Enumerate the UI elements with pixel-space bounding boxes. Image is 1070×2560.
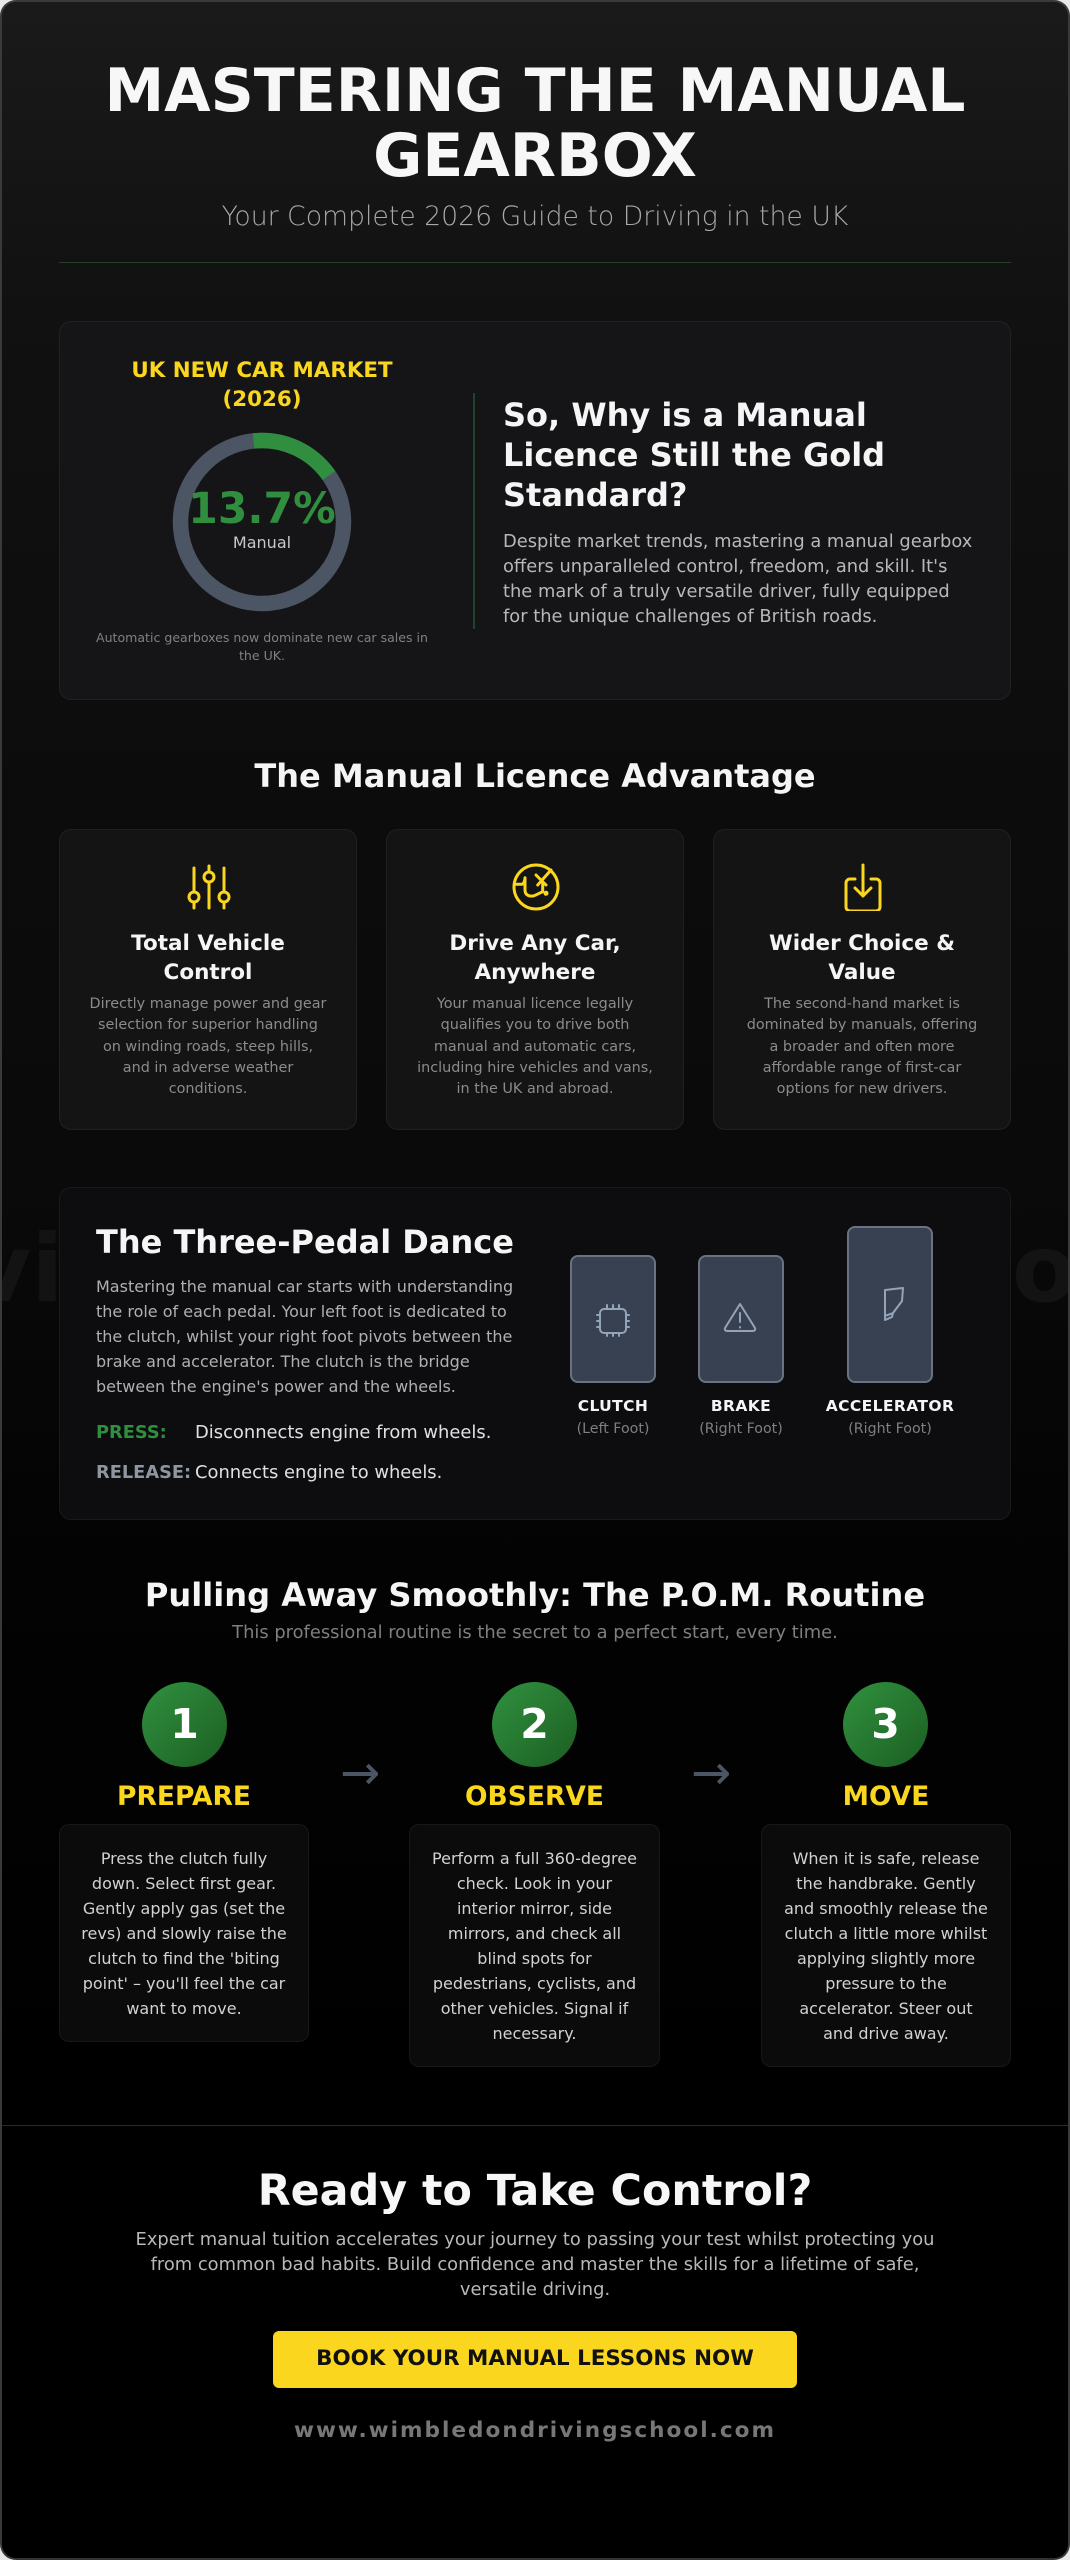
card title: Wider Choice & [769,931,955,956]
donut chart [172,432,352,612]
cta button: BOOK YOUR MANUAL LESSONS NOW [316,2346,754,2371]
why heading: So, Why is a Manual [503,396,867,434]
cta text: Expert manual tuition accelerates your journey to passing your test whilst protecting you [136,2229,934,2250]
step 1 text: clutch to find the 'biting [88,1949,280,1968]
card title: Value [828,960,896,985]
label: clutch: CLUTCH [578,1397,648,1415]
label: brake: (Right Foot) [699,1421,783,1437]
card title [131,931,285,985]
step 3 text: applying slightly more [797,1949,975,1968]
step 1 text: down. Select first gear. [92,1874,276,1893]
step 2 text [432,1849,637,2043]
card text: a broader and often more [770,1039,954,1055]
step 3 text: When it is safe, release [793,1849,979,1868]
step 2 box [409,1824,660,2067]
step 2 text: Perform a full 360-degree [432,1849,637,1868]
why paragraph: for the unique challenges of British roads. [503,606,877,627]
card text [90,996,326,1097]
step 3 number: 3 [871,1700,900,1748]
step 1 text: revs) and slowly raise the [81,1924,287,1943]
step 2 text: interior mirror, side [457,1899,612,1918]
pedal: accelerator [847,1226,933,1383]
panel: call to action [0,2125,1070,2560]
label: accelerator [826,1397,954,1437]
pedal paragraph: the clutch, whilst your right foot pivots between the [96,1327,512,1346]
label: clutch: (Left Foot) [577,1421,649,1437]
step 1 text: point' – you'll feel the car [83,1974,285,1993]
icon: sliders [188,864,230,910]
card title: Total Vehicle [131,931,285,956]
card text: including hire vehicles and vans, [417,1060,653,1076]
market caption [96,630,428,663]
card text: manual and automatic cars, [434,1039,636,1055]
panel: wider choice [713,829,1011,1130]
vertical divider [473,393,475,629]
card text: dominated by manuals, offering [747,1017,977,1033]
why paragraph [503,531,972,627]
step 2 text: blind spots for [477,1949,592,1968]
label: accelerator: ACCELERATOR [826,1397,954,1415]
step 3 text: and drive away. [823,2024,949,2043]
step 3 text: accelerator. Steer out [799,1999,973,2018]
cta text [136,2229,934,2300]
card text: qualifies you to drive both [441,1017,629,1033]
label: brake [699,1397,783,1437]
subtitle: Your Complete 2026 Guide to Driving in the UK [222,201,848,232]
pedal: brake [698,1255,784,1383]
card text: affordable range of first-car [763,1060,961,1076]
pedal paragraph: the role of each pedal. Your left foot is dedicated to [96,1302,507,1321]
market caption: Automatic gearboxes now dominate new car sales in [96,630,428,645]
cta text: from common bad habits. Build confidence and master the skills for a lifetime of safe, [151,2254,919,2275]
pedal heading: The Three-Pedal Dance [96,1223,514,1261]
cta text: versatile driving. [460,2279,610,2300]
step 3 text: and smoothly release the [784,1899,988,1918]
card text: Directly manage power and gear [90,996,326,1012]
step 2 number [492,1682,577,1767]
pedal: clutch [570,1255,656,1383]
donut value: 13.7% [188,485,336,534]
icon: download box [844,864,882,911]
why heading: Standard? [503,476,687,514]
release description: Connects engine to wheels. [195,1462,442,1483]
release label: RELEASE: [96,1462,191,1483]
icons: pedals [596,1287,904,1337]
step 2 number: 2 [520,1700,549,1748]
step 1 text [81,1849,287,2018]
market caption: the UK. [239,648,285,663]
donut label: Manual [233,533,291,552]
card text: Your manual licence legally [437,996,633,1012]
pedal paragraph: between the engine's power and the wheels. [96,1377,456,1396]
icon: steering wheel crossed [512,864,560,910]
step 3 text [784,1849,988,2043]
press description: Disconnects engine from wheels. [195,1422,491,1443]
label: clutch [577,1397,649,1437]
card text [747,996,977,1097]
card title: Anywhere [475,960,595,985]
why paragraph: the mark of a truly versatile driver, fully equipped [503,581,950,602]
step 2 title: OBSERVE [465,1781,604,1812]
market heading: UK NEW CAR MARKET [131,358,393,383]
label: brake: BRAKE [711,1397,771,1415]
card text: in the UK and abroad. [457,1081,613,1097]
label: accelerator: (Right Foot) [848,1421,932,1437]
card title [449,931,621,985]
step 3 text: pressure to the [825,1974,947,1993]
step 3 box [761,1824,1011,2067]
step 1 number [142,1682,227,1767]
pom subtitle: This professional routine is the secret to a perfect start, every time. [232,1622,838,1643]
card text: options for new drivers. [777,1081,947,1097]
why heading [503,396,885,514]
title [104,56,966,191]
panel: three-pedal dance [59,1187,1011,1520]
panel: drive any car [386,829,684,1130]
step 1 number: 1 [170,1700,199,1748]
arrow 2: → [691,1745,731,1801]
step 2 text: pedestrians, cyclists, and [433,1974,636,1993]
card text: and in adverse weather [123,1060,293,1076]
step 2 text: mirrors, and check all [448,1924,621,1943]
title: GEARBOX [373,121,697,191]
step 2 text: necessary. [493,2024,576,2043]
cta button [273,2331,797,2388]
pedal paragraph: brake and accelerator. The clutch is the bridge [96,1352,470,1371]
panel: market and gold standard [59,321,1011,700]
why paragraph: offers unparalleled control, freedom, and skill. It's [503,556,947,577]
card text: The second-hand market is [764,996,960,1012]
step 1 text: Press the clutch fully [101,1849,267,1868]
pedal paragraph: Mastering the manual car starts with understanding [96,1277,513,1296]
card title: Drive Any Car, [449,931,621,956]
card text [417,996,653,1097]
arrow 1: → [340,1745,380,1801]
step 2 text: check. Look in your [457,1874,612,1893]
step 1 box [59,1824,309,2042]
step 3 text: clutch a little more whilst [785,1924,987,1943]
press label: PRESS: [96,1422,167,1443]
website url: www.wimbledondrivingschool.com [294,2418,776,2443]
step 3 number [843,1682,928,1767]
market heading [131,358,393,412]
title: MASTERING THE MANUAL [104,56,966,126]
why heading: Licence Still the Gold [503,436,885,474]
header divider [59,262,1011,263]
step 1 text: Gently apply gas (set the [83,1899,285,1918]
card text: on winding roads, steep hills, [103,1039,313,1055]
card title: Control [164,960,252,985]
step 2 text: other vehicles. Signal if [441,1999,628,2018]
step 1 title: PREPARE [117,1781,251,1812]
step 1 text: want to move. [126,1999,242,2018]
cta heading: Ready to Take Control? [258,2166,812,2216]
panel: total vehicle control [59,829,357,1130]
pedal paragraph [96,1277,513,1396]
card text: conditions. [169,1081,247,1097]
heading: pom routine: Pulling Away Smoothly: The P.O.M. Routine [145,1576,925,1614]
step 3 title: MOVE [843,1781,929,1812]
step 3 text: the handbrake. Gently [796,1874,976,1893]
market heading: (2026) [222,386,302,412]
heading: manual licence advantage: The Manual Licence Advantage [254,757,816,795]
card title [769,931,955,985]
card text: selection for superior handling [98,1017,318,1033]
why paragraph: Despite market trends, mastering a manual gearbox [503,531,972,552]
